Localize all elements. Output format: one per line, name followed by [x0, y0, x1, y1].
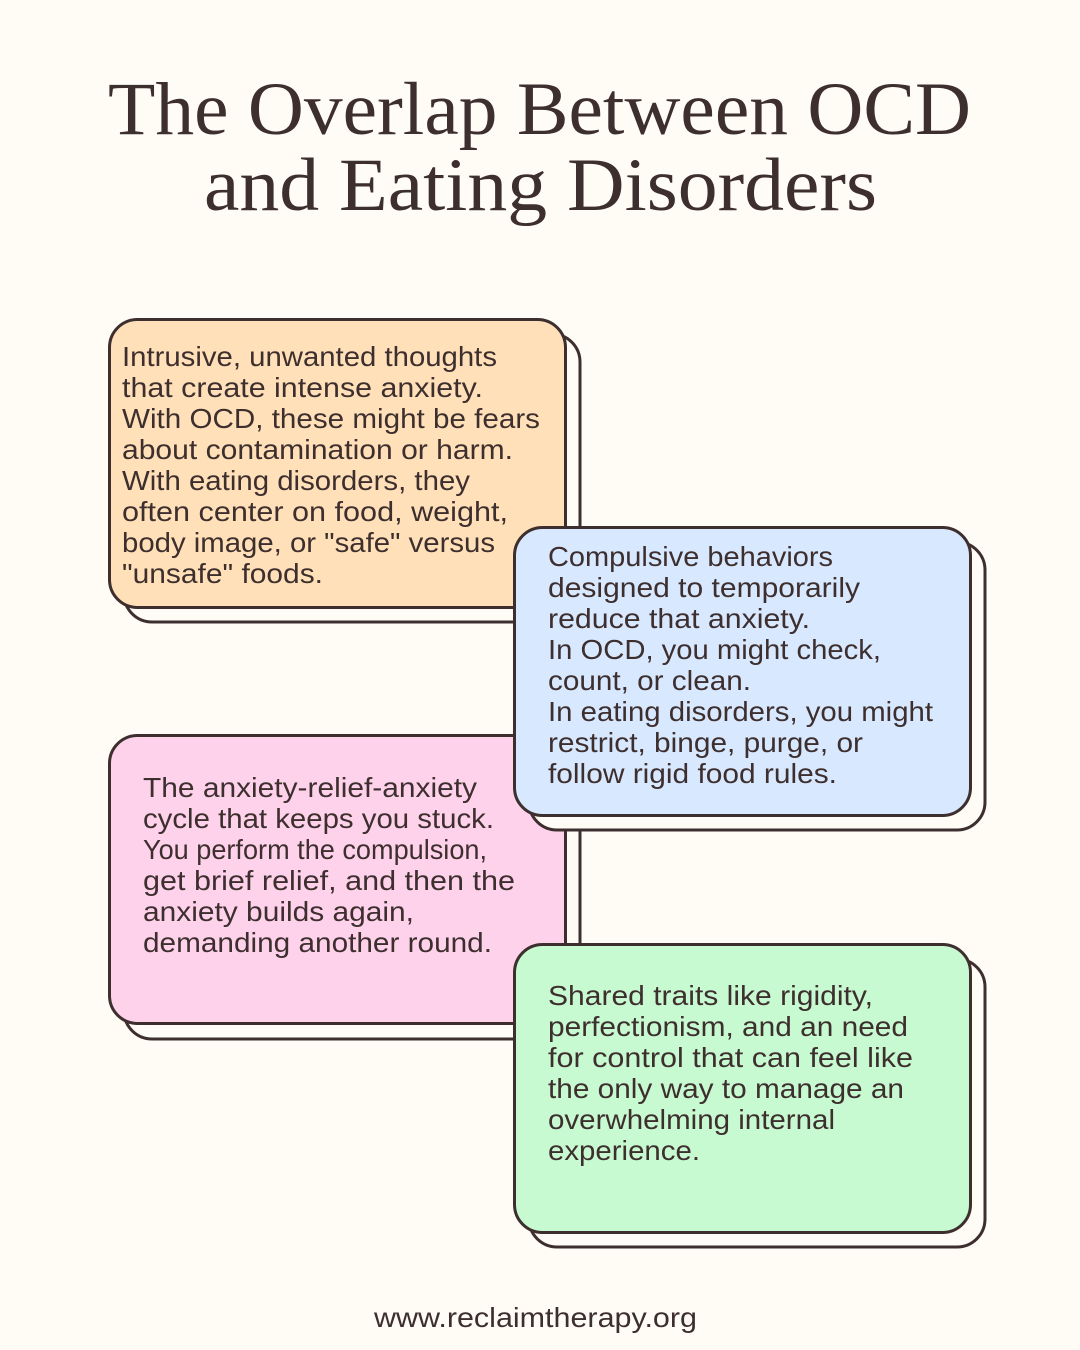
text: intrusive thoughts: that create intense anxiety. [122, 372, 483, 403]
panel: shared traits [514, 944, 985, 1247]
text: intrusive thoughts: "unsafe" foods. [122, 558, 323, 589]
text: compulsive behaviors: designed to temporarily [548, 572, 860, 603]
title: The Overlap Between OCD [108, 68, 971, 151]
text: compulsive behaviors: In eating disorders, you might [548, 696, 933, 727]
text: intrusive thoughts: often center on food, weight, [122, 496, 508, 527]
text: compulsive behaviors: follow rigid food rules. [548, 758, 837, 789]
text: compulsive behaviors: Compulsive behaviors [548, 541, 833, 572]
text: anxiety cycle: anxiety builds again, [143, 896, 414, 927]
text: compulsive behaviors: restrict, binge, purge, or [548, 727, 863, 758]
footer website: www.reclaimtherapy.org [373, 1302, 697, 1333]
text: shared traits: Shared traits like rigidity, [548, 980, 873, 1011]
text: intrusive thoughts [122, 341, 540, 589]
text: anxiety cycle: The anxiety-relief-anxiety [143, 772, 477, 803]
text: shared traits: for control that can feel like [548, 1042, 913, 1073]
text: compulsive behaviors: In OCD, you might check, [548, 634, 881, 665]
text: compulsive behaviors: reduce that anxiety. [548, 603, 810, 634]
text: shared traits: experience. [548, 1135, 700, 1166]
text: compulsive behaviors: count, or clean. [548, 665, 751, 696]
text: anxiety cycle: demanding another round. [143, 927, 492, 958]
text: anxiety cycle: get brief relief, and then the [143, 865, 515, 896]
text: intrusive thoughts: With eating disorders, they [122, 465, 470, 496]
text: intrusive thoughts: about contamination or harm. [122, 434, 513, 465]
text: shared traits: overwhelming internal [548, 1104, 835, 1135]
text: intrusive thoughts: With OCD, these might be fears [122, 403, 540, 434]
text: intrusive thoughts: body image, or "safe" versus [122, 527, 495, 558]
text: anxiety cycle: cycle that keeps you stuck. [143, 803, 494, 834]
text: shared traits: perfectionism, and an need [548, 1011, 908, 1042]
text: shared traits: the only way to manage an [548, 1073, 904, 1104]
panel: compulsive behaviors [514, 528, 985, 830]
panel: anxiety cycle [110, 736, 580, 1039]
text: compulsive behaviors [548, 541, 933, 789]
title: and Eating Disorders [204, 144, 877, 227]
text: anxiety cycle: You perform the compulsion, [143, 834, 487, 865]
text: intrusive thoughts: Intrusive, unwanted thoughts [122, 341, 497, 372]
text: anxiety cycle [143, 772, 515, 958]
panel: intrusive thoughts [110, 320, 580, 622]
title [108, 68, 971, 227]
text: shared traits [548, 980, 913, 1166]
